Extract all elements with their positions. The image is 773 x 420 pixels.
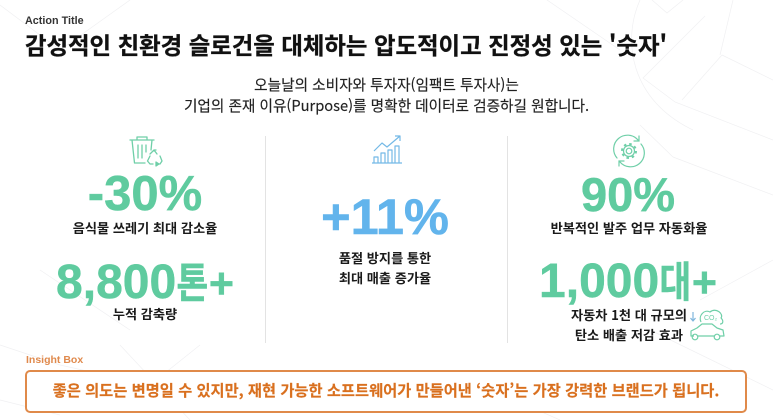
insight box — [25, 370, 747, 413]
label: carbon: 탄소 배출 저감 효과 — [575, 324, 683, 344]
icon: trash with recycle — [129, 136, 163, 167]
stat: 8,800 tons: 톤 — [177, 250, 208, 311]
title: 감성적인 친환경 슬로건을 대체하는 압도적이고 진정성 있는 '숫자' — [25, 27, 667, 61]
eyebrow: Action Title: Action Title — [25, 15, 84, 27]
icon: CO2 car: CO₂ — [704, 315, 718, 322]
divider left — [265, 136, 266, 343]
icon: gear cycle — [613, 134, 645, 168]
stat: +11%: +11% — [321, 188, 449, 245]
label: automation: 반복적인 발주 업무 자동화율 — [551, 218, 707, 237]
label: carbon: 자동차 1천 대 규모의 — [571, 305, 687, 324]
subtitle — [184, 74, 589, 116]
label: food waste: 음식물 쓰레기 최대 감소율 — [73, 218, 217, 237]
stat: -30%: -30% — [88, 167, 202, 221]
stat: 8,800 tons: 8,800 + — [56, 256, 234, 309]
stat: 1,000 cars: 대 — [660, 249, 691, 310]
stat: 1,000 cars: 1,000 + — [539, 255, 717, 308]
divider right — [507, 136, 508, 343]
subtitle: 오늘날의 소비자와 투자자(임팩트 투자사)는 — [254, 74, 519, 95]
icon: CO2 car — [690, 310, 725, 340]
label: sales increase: 품절 방지를 통한 — [339, 248, 431, 267]
eyebrow: Insight Box: Insight Box — [26, 354, 83, 366]
subtitle: 기업의 존재 이유(Purpose)를 명확한 데이터로 검증하길 원합니다. — [184, 94, 589, 116]
label: sales increase: 최대 매출 증가율 — [339, 268, 431, 287]
label: sales increase — [339, 248, 431, 287]
panel: right column — [539, 134, 725, 344]
stat: 90%: 90% — [581, 168, 675, 221]
icon: growth chart — [372, 135, 402, 164]
label: cumulative: 누적 감축량 — [113, 304, 177, 323]
panel: left column — [56, 136, 234, 323]
panel: center column — [321, 135, 449, 287]
insight text: 좋은 의도는 변명일 수 있지만, 재현 가능한 소프트웨어가 만들어낸 ‘숫자’는 가장 강력한 브랜드가 됩니다. — [53, 379, 719, 401]
label: carbon — [571, 305, 687, 344]
